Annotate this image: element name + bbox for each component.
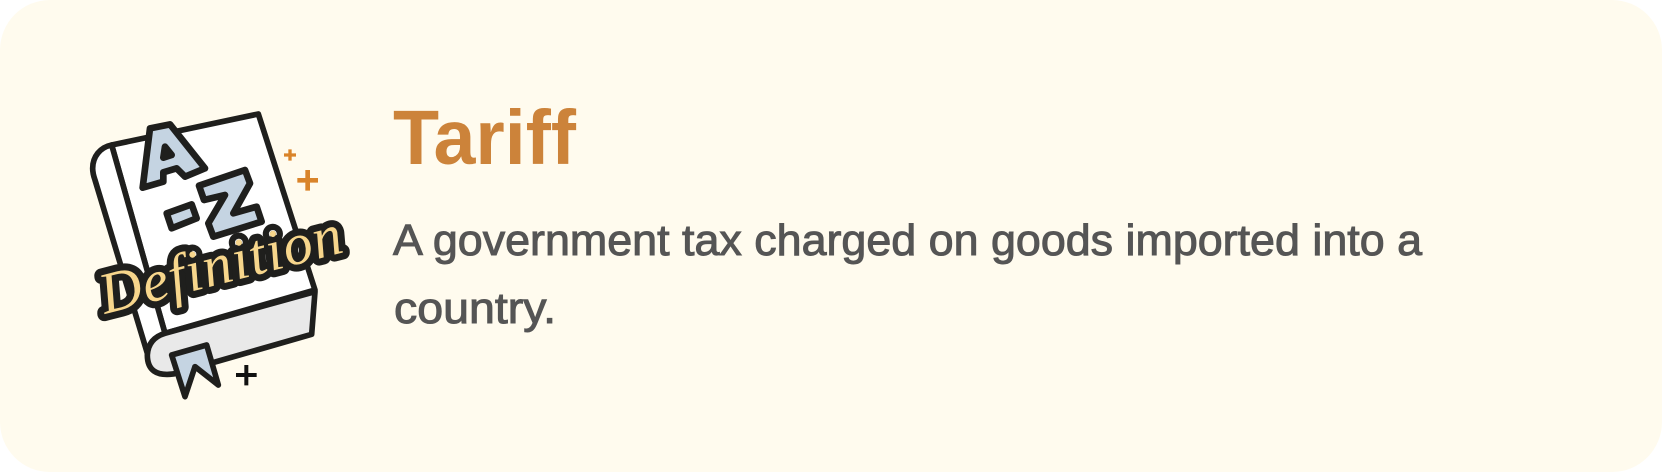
icon: definition book [91, 114, 349, 397]
definition line 2: country. [394, 285, 556, 333]
letter A [143, 124, 205, 188]
title: Tariff [393, 95, 576, 181]
book pages [147, 292, 315, 374]
bookmark ribbon [172, 345, 218, 397]
definition line 1: A government tax charged on goods imported into a [393, 217, 1423, 265]
definition text [393, 217, 1423, 333]
book spine [93, 145, 165, 353]
script word: Definition: Definition [91, 201, 349, 327]
script word: Definition: Definition [91, 201, 349, 327]
letter dash [167, 204, 197, 228]
letter Z [199, 170, 262, 237]
orange plus small [284, 149, 296, 161]
book front cover [112, 114, 315, 333]
black plus [236, 365, 257, 385]
orange plus large [297, 170, 318, 191]
